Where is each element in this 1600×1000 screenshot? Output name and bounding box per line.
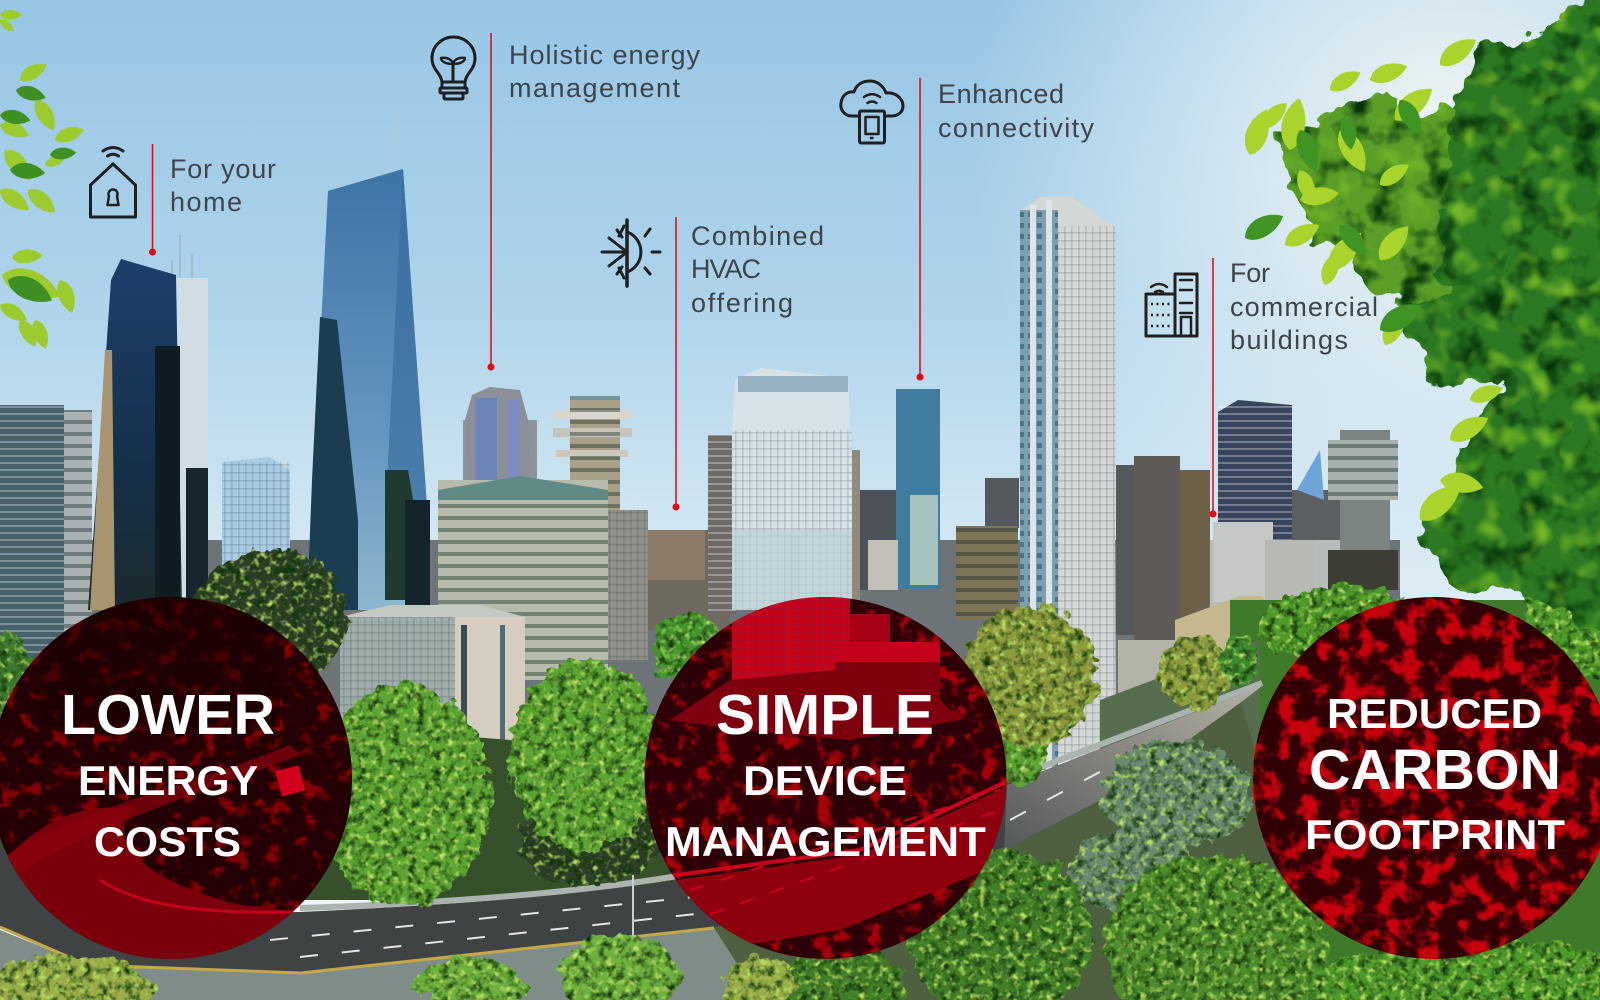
building: dark towers group [1116,456,1210,671]
building: teal blue tower [896,389,940,589]
building: blue shard [1297,450,1324,500]
lime leaves upper cluster [1239,31,1506,528]
dark canopy mass [1400,0,1600,640]
small green tree [1222,634,1258,686]
heading text: MANAGEMENT [665,818,986,865]
label: Combined [691,221,824,251]
trees [0,550,1600,1000]
red circle [1253,597,1600,959]
building: tall white tower [1020,196,1116,770]
pointer line [916,78,924,380]
icon: cloud and phone [841,81,903,143]
ground behind trees [0,600,1600,1000]
pointer line [488,33,494,370]
elevated road [0,683,1300,1000]
heading text: SIMPLE [716,683,934,747]
lower right greenery [1260,560,1600,1000]
red road area [0,808,300,960]
heading text: COSTS [94,818,241,865]
building: round-top tower [463,387,537,500]
road barriers [300,683,1262,908]
building: grey stepped tower [1328,430,1398,590]
foliage: left branch leaves [0,10,86,351]
panel: simple device management [640,597,1010,960]
city skyline [0,112,1400,830]
callout: combined HVAC offering [602,217,824,510]
concrete under road [0,928,760,1000]
callout: holistic energy management [432,33,700,370]
light road section [1004,686,1262,850]
building: stepped tan tower [553,395,632,530]
olive trees [962,605,1231,745]
green leaves [0,83,77,309]
label: For your [170,154,276,184]
label: HVAC [691,254,761,284]
yellow-green shrubs [0,955,796,1000]
foliage: right canopy [1239,0,1600,640]
building: white block [1213,522,1315,610]
callout: enhanced connectivity [841,78,1094,380]
red building [670,662,960,740]
grey-green trees [1068,740,1251,912]
foreground shrubs [415,935,680,1000]
building: wide striped office [438,476,648,680]
label: management [509,73,680,103]
red circle [0,597,352,960]
pointer line [1210,258,1216,518]
panel: reduced carbon footprint [1253,597,1600,959]
building: dark glass tower with antennas [88,235,208,616]
label: offering [691,288,793,318]
lime leaves [0,10,86,351]
pointer line [149,144,156,256]
icon: bulb with sprout [432,37,475,99]
building: brown slab [708,435,736,615]
street lamp [632,830,634,940]
heading text: DEVICE [743,757,907,804]
mid green leaves [1240,95,1428,339]
heading text: ENERGY [78,757,258,804]
dark trees behind [0,550,660,885]
pointer line [672,217,680,510]
red circle [640,597,1010,960]
bright green trees [321,612,1046,907]
label: Holistic energy [509,40,700,70]
ground under bridge [714,700,1300,1000]
building: tall blue glass tower [307,112,430,610]
building: left block [0,405,92,665]
building: pale office block [340,605,525,830]
heading text: REDUCED [1327,690,1542,737]
label: Enhanced [938,79,1064,109]
dark treetops [40,597,280,727]
road surface [0,686,1262,973]
heading text: LOWER [61,683,275,747]
label: home [170,187,242,217]
label: connectivity [938,113,1094,143]
road edge line [0,927,714,973]
red road [676,786,1006,944]
dark green front trees [785,850,1327,1000]
callout: for commercial buildings [1146,258,1378,518]
building: small light glass block [222,457,290,565]
label: commercial [1230,292,1378,322]
mid green leaf cluster [1280,95,1450,300]
icon: sun and snowflake [602,220,660,286]
heading text: CARBON [1309,738,1561,802]
icon: office buildings [1146,274,1197,336]
icon: smart home [90,148,136,217]
heading text: FOOTPRINT [1305,811,1565,858]
panel: lower energy costs [0,597,352,960]
lane dashes [270,745,1150,957]
label: For [1230,258,1270,288]
red tower [732,597,850,680]
label: buildings [1230,325,1348,355]
building: spiral tower [1218,400,1292,540]
building: brown low rise [868,526,1018,620]
distant mid-rise band [0,478,1400,720]
building: beige roof block [1118,596,1285,700]
callout: for your home [90,144,276,256]
building: main white high-rise [732,368,860,610]
